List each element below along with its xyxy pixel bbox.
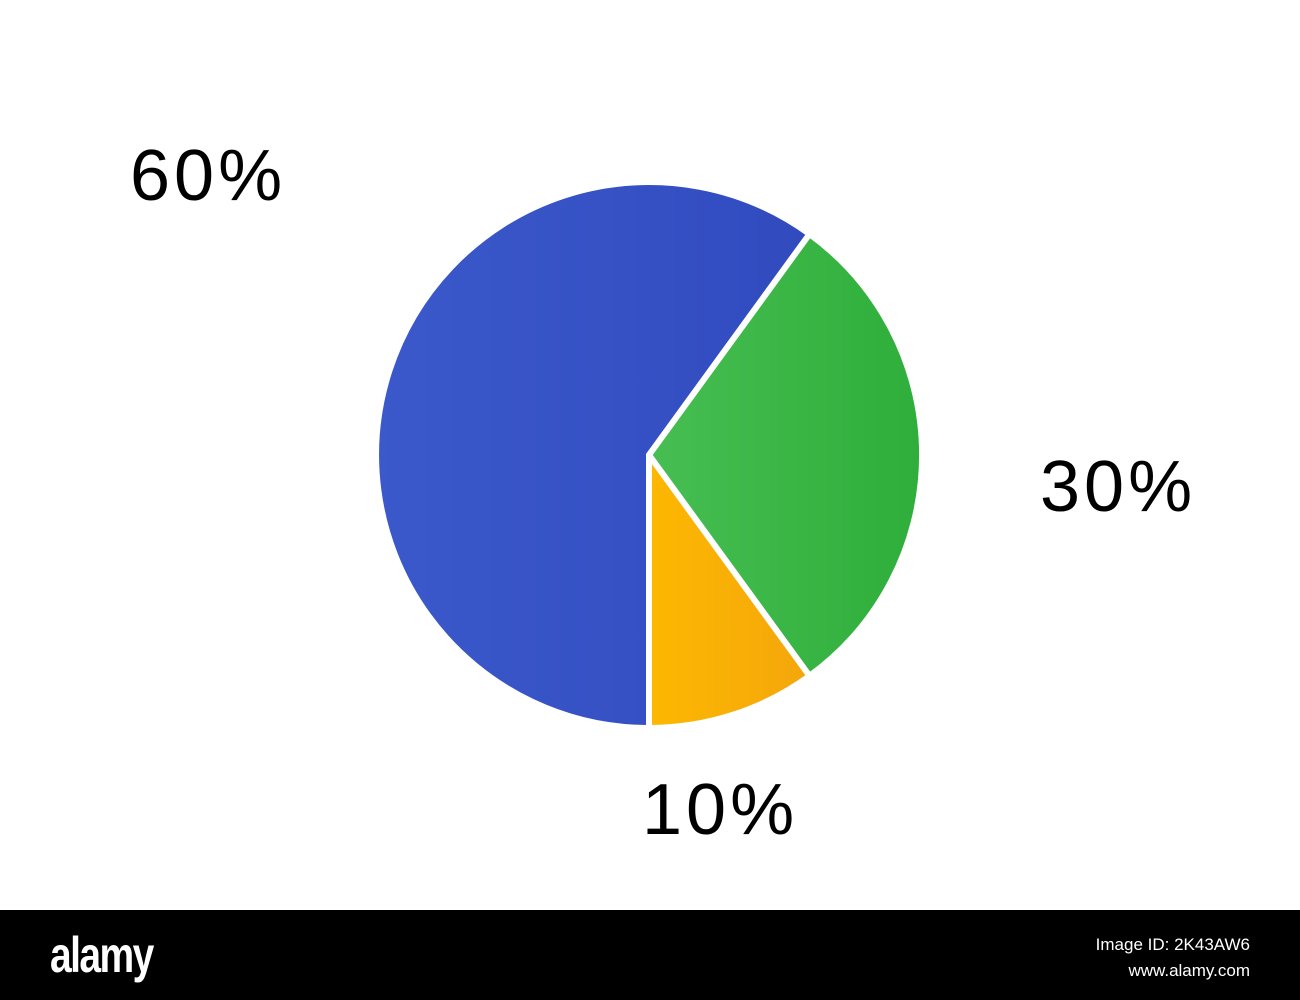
slice: 10% yellow <box>649 455 810 728</box>
footer image id <box>1096 935 1250 980</box>
label 10%: 10% <box>642 770 798 850</box>
footer bar <box>0 910 1300 1000</box>
label 30%: 30% <box>1040 447 1196 527</box>
slice: 30% green <box>649 234 922 676</box>
footer logo: alamy <box>50 927 153 983</box>
footer image id: Image ID: 2K43AW6 <box>1096 935 1250 954</box>
footer image id: www.alamy.com <box>1128 961 1250 980</box>
slice: 60% blue <box>376 182 810 728</box>
label 60%: 60% <box>130 136 286 216</box>
